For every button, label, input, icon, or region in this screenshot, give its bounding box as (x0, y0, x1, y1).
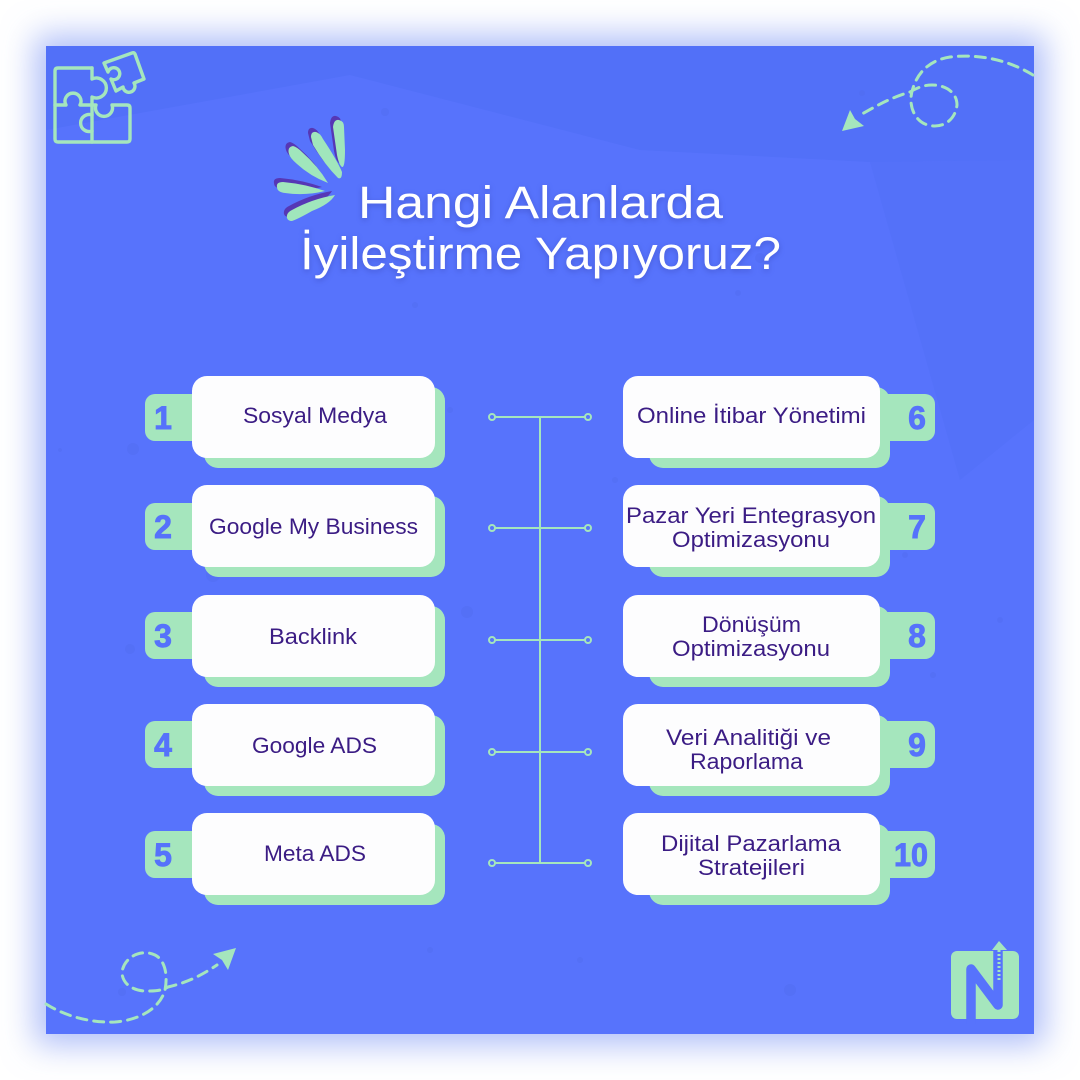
item 4: 4 (154, 727, 172, 763)
item 3 (145, 595, 445, 687)
title: İyileştirme Yapıyoruz? (300, 228, 781, 279)
item 8: Dönüşüm (702, 612, 801, 637)
item 4 (145, 704, 445, 796)
title (300, 177, 781, 279)
item 8 (623, 595, 935, 687)
item 2: 2 (154, 509, 172, 545)
item 7: Pazar Yeri Entegrasyon (626, 503, 876, 528)
icon: dashed arrow bottom left (46, 948, 236, 1022)
item 10: Stratejileri (698, 855, 805, 880)
item 1: 1 (154, 400, 172, 436)
item 3: 3 (154, 618, 172, 654)
item 5: 5 (154, 837, 172, 873)
item 7 (623, 485, 935, 577)
item 7: Optimizasyonu (672, 527, 830, 552)
item 8: 8 (908, 618, 926, 654)
icon: logo (951, 941, 1019, 1024)
item 6: 6 (908, 400, 926, 436)
icon: burst emblem (274, 116, 345, 221)
item 10 (623, 813, 935, 905)
item 6: Online İtibar Yönetimi (637, 403, 866, 428)
item 5: Meta ADS (264, 841, 366, 866)
item 1 (145, 376, 445, 468)
item 9 (623, 704, 935, 796)
item 2 (145, 485, 445, 577)
item 10: Dijital Pazarlama (661, 831, 842, 856)
item 9: Veri Analitiği ve (666, 725, 831, 750)
item 7: 7 (908, 509, 926, 545)
icon: puzzle (55, 53, 144, 142)
item 2: Google My Business (209, 514, 418, 539)
title: Hangi Alanlarda (358, 177, 724, 228)
icon: dashed arrow top right (842, 56, 1033, 131)
item 10: 10 (894, 837, 928, 873)
connector lines (489, 414, 591, 866)
item 3: Backlink (269, 624, 358, 649)
item 4: Google ADS (252, 733, 377, 758)
item 6 (623, 376, 935, 468)
item 1: Sosyal Medya (243, 403, 387, 428)
item 8: Optimizasyonu (672, 636, 830, 661)
item 9: 9 (908, 727, 926, 763)
item 5 (145, 813, 445, 905)
item 9: Raporlama (690, 749, 803, 774)
